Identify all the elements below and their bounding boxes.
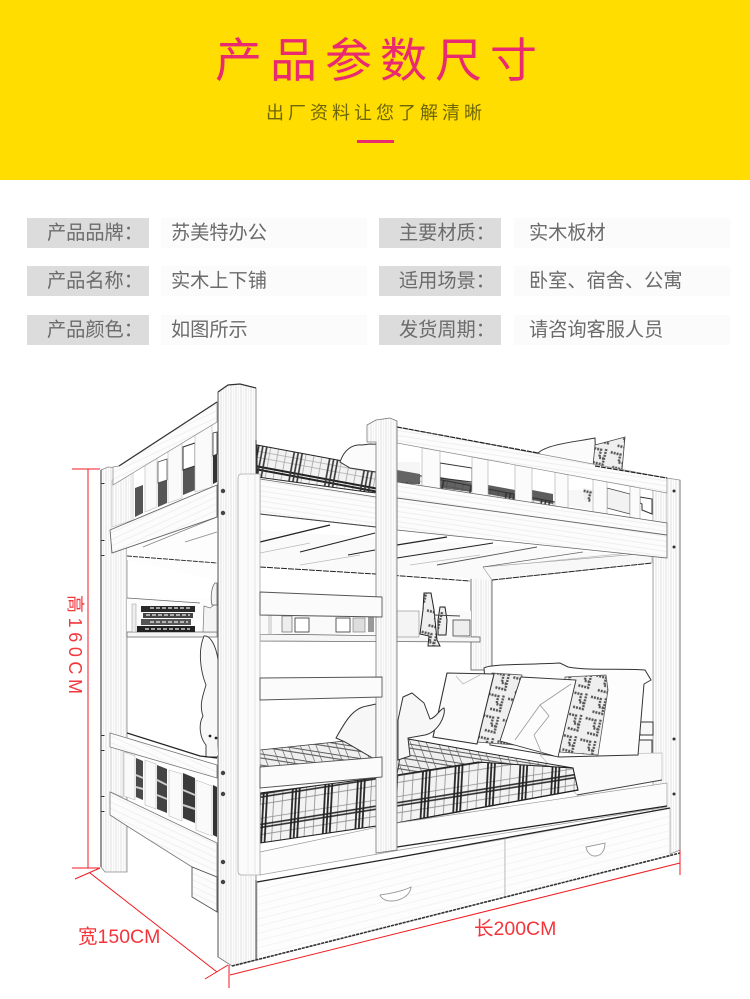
- upper front frame rail: [260, 479, 667, 558]
- row 2 value: usage: 卧室、宿舍、公寓: [529, 271, 682, 292]
- upper pillows: [340, 437, 652, 514]
- upper mattress: [257, 445, 560, 512]
- upper front guard top rail: [397, 427, 667, 493]
- row 1 value: brand: [161, 218, 367, 248]
- width dimension: [75, 868, 228, 979]
- rabbit toy: [200, 636, 218, 757]
- shelf ornaments left: [203, 583, 217, 632]
- plaid blanket lower bunk: [260, 738, 578, 843]
- ladder right rail: [367, 418, 397, 853]
- row 2 label: name: 产品名称：: [47, 271, 143, 292]
- blanket top surface left: [260, 741, 376, 775]
- patterned pillow left: [477, 673, 522, 745]
- row 3 value: delivery: [514, 315, 730, 345]
- height label: 高160CM: [65, 595, 85, 699]
- corner post: [218, 384, 256, 966]
- row 3 label: delivery: 发货周期：: [399, 320, 495, 341]
- row 2 label: name: [27, 266, 149, 296]
- row 3 label: colour: 产品颜色：: [47, 320, 143, 341]
- bunk bed illustration with dimensions: [65, 383, 680, 988]
- lower side gaps plaid: [136, 758, 217, 837]
- row 1 label: brand: 产品品牌：: [47, 223, 143, 244]
- header band: [0, 0, 750, 180]
- row 1 label: material: [379, 218, 501, 248]
- ladder rung 2: [260, 677, 382, 700]
- upper side slats: [127, 517, 217, 580]
- row 3 value: colour: [161, 315, 367, 345]
- upper front guard spindles: [422, 448, 667, 525]
- row 1 value: material: 实木板材: [529, 223, 606, 244]
- rear-right upright: [471, 570, 492, 670]
- rabbit face: [207, 733, 218, 755]
- row 1 value: brand: 苏美特办公: [171, 223, 267, 244]
- row 3 value: colour: 如图所示: [171, 320, 248, 341]
- patterned pillow right: [560, 675, 608, 755]
- ladder rung 3: [260, 757, 382, 788]
- drawers: [232, 808, 680, 966]
- left drawer handle: [380, 887, 411, 901]
- shelf items and giraffe toys: [397, 593, 471, 646]
- lower bunk front rail: [257, 783, 670, 882]
- accent bar: [357, 140, 394, 143]
- row 2 value: usage: [514, 266, 730, 296]
- row 1 label: brand: [27, 218, 149, 248]
- ladder left rail: [238, 474, 260, 875]
- subtitle: 出厂资料让您了解清晰: [266, 103, 486, 123]
- title: 产品参数尺寸: [215, 34, 545, 87]
- elephant toy: [336, 693, 444, 760]
- underside slats of upper bunk: [260, 525, 652, 581]
- row 2 label: usage: [379, 266, 501, 296]
- blanket top surface right: [397, 738, 573, 775]
- drawer lower edge: [232, 853, 680, 966]
- row 1 value: material: [514, 218, 730, 248]
- lower bunk white sheet: [540, 753, 662, 795]
- row 3 label: colour: [27, 315, 149, 345]
- shelf items behind ladder: [260, 614, 382, 634]
- parameter table: [27, 218, 682, 345]
- shelf with side opening: [127, 598, 480, 642]
- stack of books: [137, 606, 195, 632]
- row 2 value: name: 实木上下铺: [171, 271, 267, 292]
- width label: 宽150CM: [78, 926, 160, 948]
- length dimension: [229, 850, 680, 988]
- lower side top rail: [110, 733, 217, 778]
- row 1 label: material: 主要材质：: [399, 223, 495, 244]
- height dimension: [65, 469, 100, 868]
- row 2 label: usage: 适用场景：: [399, 271, 495, 292]
- row 3 value: delivery: 请咨询客服人员: [529, 320, 663, 341]
- upper front guard gaps: [397, 463, 553, 504]
- lower side bottom rail: [110, 792, 217, 877]
- back pillows: [484, 663, 651, 757]
- upper side guard opening plaid: [135, 432, 217, 517]
- ladder rung 1: [260, 592, 382, 617]
- length label: 长200CM: [474, 918, 556, 940]
- plain pillow centre: [500, 677, 576, 757]
- upper side top rail: [113, 402, 217, 485]
- right drawer: [505, 808, 670, 897]
- upper side frame rail: [110, 485, 217, 553]
- lower side spindles: [111, 746, 212, 836]
- row 3 label: delivery: [379, 315, 501, 345]
- right drawer handle: [586, 843, 605, 856]
- back-left post: [101, 465, 127, 872]
- upper side guard spindles: [112, 420, 212, 527]
- rear leg block: [192, 867, 217, 912]
- row 2 value: name: [161, 266, 367, 296]
- left drawer: [257, 839, 505, 960]
- right post: [637, 478, 680, 855]
- plain pillow left: [433, 673, 494, 744]
